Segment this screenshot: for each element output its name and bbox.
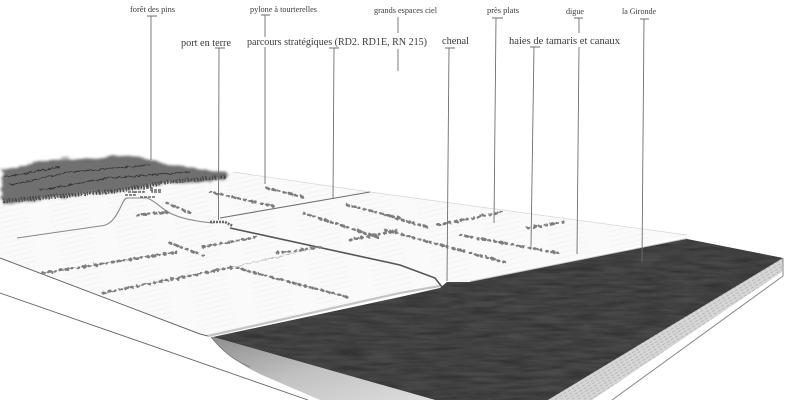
label: la Gironde xyxy=(622,7,656,262)
village xyxy=(125,188,162,197)
label: grands espaces ciel: grands espaces ciel xyxy=(374,6,438,15)
label: forêt des pins xyxy=(130,5,175,160)
label: près plats: près plats xyxy=(487,6,519,15)
label: parcours stratégiques: parcours stratégiques (RD2. RD1E, RN 215) xyxy=(247,37,427,48)
label: pylone à tourterelles: pylone à tourterelles xyxy=(250,5,317,14)
label: près plats xyxy=(487,6,519,223)
hedges of tamarisk and canals xyxy=(43,188,565,297)
label: pylone à tourterelles xyxy=(250,5,317,184)
label: la Gironde: la Gironde xyxy=(622,7,656,16)
label: haies de tamaris et canaux: haies de tamaris et canaux xyxy=(509,36,621,47)
label: grands espaces ciel xyxy=(374,6,438,71)
label: haies de tamaris et canaux xyxy=(509,36,621,246)
la Gironde: dark water surface xyxy=(213,239,783,400)
river bank: front cut section xyxy=(211,337,435,400)
label: chenal xyxy=(442,36,469,281)
landscape: land surface xyxy=(0,172,687,400)
label: port en terre: port en terre xyxy=(181,38,231,49)
label: digue: digue xyxy=(566,7,584,16)
label: port en terre xyxy=(181,38,231,220)
forêt des pins: dark forest mass xyxy=(2,156,228,203)
label: forêt des pins: forêt des pins xyxy=(130,5,175,14)
river bank: right cut section xyxy=(548,258,783,400)
label: chenal: chenal xyxy=(442,36,469,47)
label: parcours stratégiques xyxy=(247,37,427,199)
label: digue xyxy=(566,7,584,254)
roads xyxy=(17,192,442,287)
